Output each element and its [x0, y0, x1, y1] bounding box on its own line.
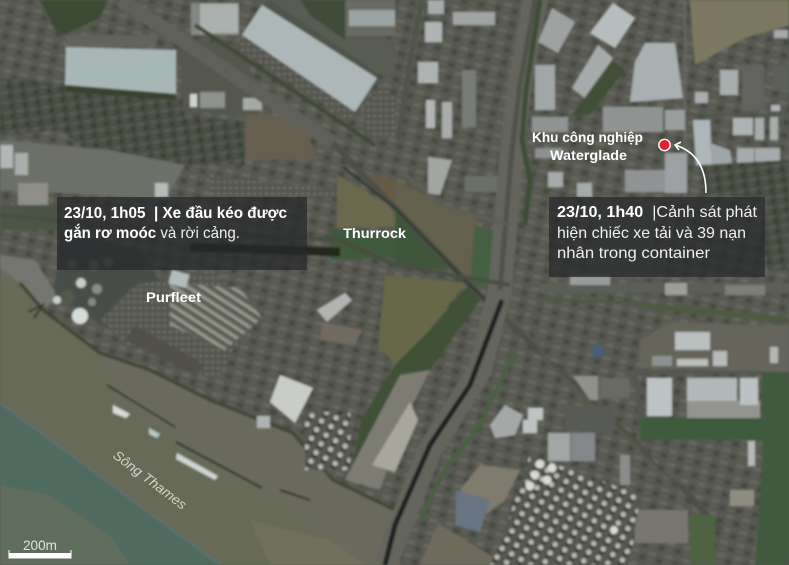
annotation box: 1h05 — [57, 197, 307, 270]
place label: Waterglade industrial park: Khu công nghiệp — [532, 130, 643, 145]
place label: Thurrock: Thurrock — [343, 226, 407, 241]
annotation box: 1h40 — [549, 197, 765, 277]
lower right industrial estate — [420, 276, 789, 565]
warehouses top left — [65, 0, 395, 140]
place label: Waterglade industrial park — [532, 130, 643, 163]
residential and green areas — [0, 0, 335, 207]
warehouses right, Waterglade park — [593, 0, 789, 278]
scale bar — [9, 538, 71, 558]
annotation box: 1h40: hiện chiếc xe tải và 39 nạn — [557, 225, 746, 242]
place label: Purfleet: Purfleet — [146, 290, 202, 305]
river label: Thames: Sông Thames — [110, 447, 190, 513]
warehouses centre — [418, 0, 635, 197]
tank farm — [490, 455, 640, 565]
annotation box: 1h40: 23/10, 1h40 |Cảnh sát phát — [557, 204, 758, 221]
Purfleet port and storage tanks — [53, 230, 262, 380]
location marker: red dot — [659, 139, 670, 151]
scale bar: 200m — [23, 538, 57, 553]
fields around Thurrock — [0, 175, 505, 480]
ships — [113, 405, 218, 480]
place label: Waterglade industrial park: Waterglade — [550, 148, 628, 163]
arrow to location — [675, 142, 706, 193]
annotation box: 1h05: 23/10, 1h05 | Xe đầu kéo được — [64, 205, 287, 222]
annotation box: 1h40: nhân trong container — [557, 245, 711, 262]
central industrial block and river terminal — [257, 293, 430, 490]
annotation box: 1h05: gắn rơ moóc và rời cảng. — [64, 223, 240, 242]
river and mudflats — [0, 268, 400, 565]
